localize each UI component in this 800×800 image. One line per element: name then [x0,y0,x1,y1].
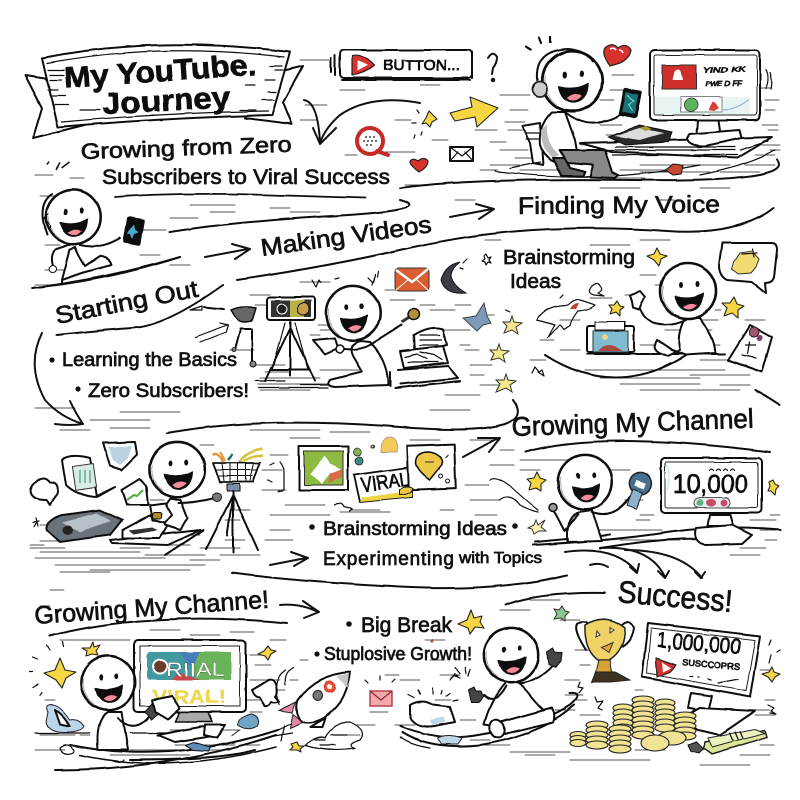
title text: My YouTube. [63,49,257,95]
shield [103,442,137,470]
head [542,51,602,111]
bullets: brainstorming and experimenting: with Topics [458,550,542,567]
character [655,318,715,356]
button label [331,50,472,80]
scene: cloud and big break character [305,628,578,749]
keyboard [608,125,672,145]
curved arrow [304,100,420,144]
icon: small star [412,110,437,138]
arrow: to growing channel [463,438,500,457]
sub-heading: brainstorming ideas: Brainstorming [503,247,635,269]
bullets: learning the basics: Zero Subscribers! [88,381,249,402]
tripod with basket [213,463,260,482]
scene: starting out character [33,162,180,288]
stars: brainstorm group [482,248,744,318]
scene: growing channel character: 10,000 [673,469,748,499]
icon: question mark [488,54,497,81]
sweeping flow lines [32,160,780,763]
icon: blue star [463,303,491,331]
splash doodle [410,702,455,726]
icon: trophy [576,619,634,682]
bullets: big break: Stuplosive Growth! [324,644,472,664]
chat bubble [30,478,58,505]
subtitle [80,132,390,189]
icon: success monitor [642,623,760,735]
heading: growing my channe: Growing My Channe! [33,586,270,630]
character [97,712,128,750]
bullets: brainstorming and experimenting: Experimenting [323,549,454,570]
stars: yellow group [490,316,522,392]
scene: viral monitor character: RIIAL [166,660,224,681]
monitor [650,50,760,120]
arrow: to big break [280,601,319,618]
title text: Journey [102,81,232,121]
character [163,498,187,530]
camera [267,297,315,320]
mouse and mic [185,742,211,751]
icon: moon [441,259,467,293]
arrow: to experimenting [270,552,308,566]
icon: success monitor: 1,000,000 [656,627,742,659]
arrow: to finding my voice [450,204,494,219]
laptop and papers [414,328,447,352]
title text [63,49,257,121]
scene: character at desk [495,37,775,178]
surfboard [400,693,578,746]
icon: success monitor: SUSCCOPRS [682,657,741,672]
bullets: big break: Big Break [361,614,452,637]
icon: heart [410,158,428,172]
icon: envelope [450,147,473,161]
scene: brainstorm character [505,243,777,378]
stars: break group [458,606,569,634]
chart card [122,479,148,505]
button label: BUTTON... [383,57,460,74]
scene: character at desk: YIND KK [703,67,745,74]
icon: mail badge [395,268,429,291]
phone [618,88,642,119]
legs [553,158,585,176]
heading: growing my channel: Growing My Channel [511,404,754,442]
monitor 10,000 [661,458,762,513]
stars: channel group [527,472,779,534]
chair [522,123,543,165]
decorations: success [578,640,780,714]
desk arc [545,354,725,378]
clipboard [728,325,772,372]
sub-heading: brainstorming ideas [503,247,635,293]
icon: rocket [274,672,350,741]
device [47,510,122,542]
panel: viral thumbnails [299,437,456,502]
heading: success: Success! [616,574,734,619]
scene: growing channel character [490,455,780,548]
desk [580,137,772,158]
thought bubble [719,243,777,293]
heading: making videos arrow [205,244,250,259]
icon: search speech bubble [357,128,388,155]
icon: coin stacks [570,696,696,753]
scribbles [312,272,378,287]
bird doodle [537,300,595,338]
body [484,682,545,728]
bullets: brainstorming and experimenting [309,519,542,570]
title banner [25,45,303,138]
icon: heart bubble [604,45,631,66]
mic [402,315,413,322]
sub-heading: brainstorming ideas: Ideas [510,271,561,293]
arrows: three down to success [565,548,705,578]
doodles [46,705,84,732]
heading: finding my voice: Finding My Voice [518,191,720,220]
scene: making videos [190,272,460,388]
icon: yellow arrow [450,97,498,127]
bullets: learning the basics: Learning the Basics [62,350,237,371]
scene: viral monitor character: VIRAL! [152,687,226,707]
tripod [265,322,315,381]
tablet [313,338,338,354]
body [540,112,578,163]
viral sticker text: VIRAL [360,468,410,497]
gadget [204,307,252,362]
bullets: learning the basics [49,350,249,402]
body and arm [328,341,388,387]
litter on floor [665,164,683,175]
arm [565,110,624,123]
subtitle: Growing from Zero [80,132,292,164]
icon: mail pink [365,676,395,706]
book pile [110,530,200,545]
heading: starting out: Starting Out [53,276,201,330]
photo frame [587,326,634,352]
scene: character at desk: PWE D FF [705,81,743,88]
head [326,286,380,340]
stars: viral group [44,642,304,752]
folder [62,456,115,497]
arrow: long curved [35,333,83,425]
heading: making videos: Making Videos [259,211,433,262]
subtitle: Subscribers to Viral Success [102,166,390,189]
scene: viral monitor character [30,640,293,770]
scene: recording desk left [30,442,352,555]
bullets: big break [314,614,472,664]
bullets: brainstorming and experimenting: Brainstorming Ideas [323,519,507,540]
icon: open book [688,729,767,754]
